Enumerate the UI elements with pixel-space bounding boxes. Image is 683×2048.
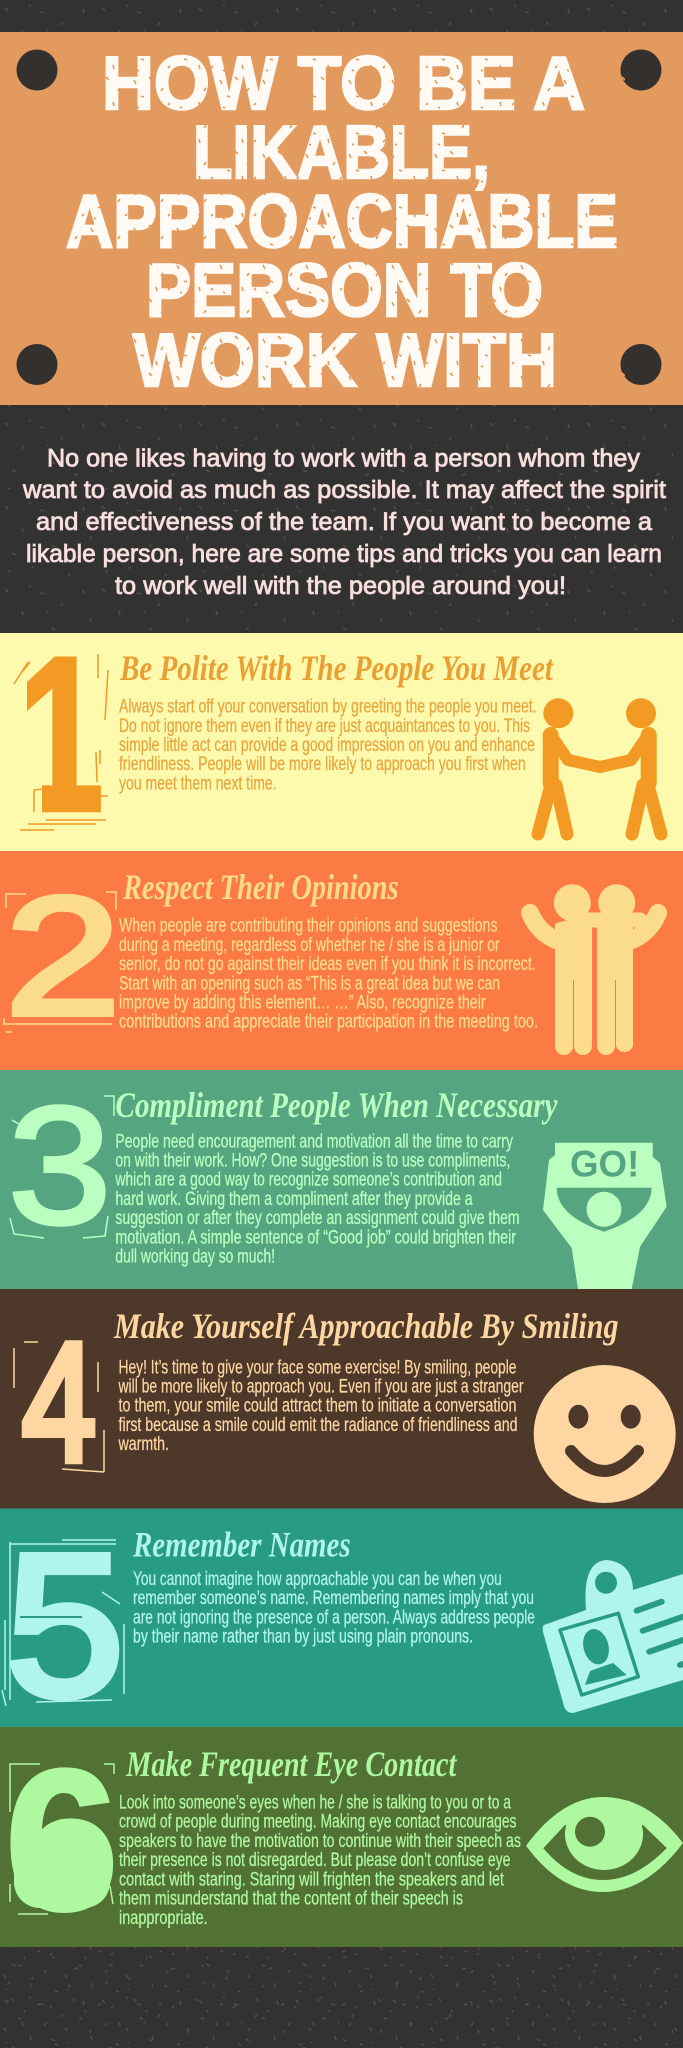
body text bbox=[119, 1792, 521, 1929]
body text: hard work. Giving them a compliment after they provide a bbox=[115, 1189, 473, 1210]
title bbox=[66, 41, 618, 402]
panel: tip 3 compliment bbox=[0, 1070, 683, 1289]
body text: When people are contributing their opinions and suggestions bbox=[119, 916, 497, 937]
icon: smiley face bbox=[534, 1365, 676, 1503]
body text: People need encouragement and motivation all the time to carry bbox=[115, 1131, 513, 1152]
numeral 4: 4 bbox=[22, 1309, 96, 1497]
body text: on with their work. How? One suggestion is to use compliments, bbox=[115, 1151, 510, 1172]
body text: friendliness. People will be more likely to approach you first when bbox=[119, 754, 526, 775]
panel: tip 2 respect bbox=[0, 851, 683, 1070]
panel: tip 1 polite bbox=[0, 612, 683, 858]
body text: dull working day so much! bbox=[115, 1246, 275, 1267]
numeral 2: 2 bbox=[5, 863, 121, 1050]
body text: which are a good way to recognize someone’s contribution and bbox=[115, 1170, 502, 1191]
body text bbox=[119, 916, 538, 1033]
panel: tip 5 names bbox=[0, 1508, 683, 1738]
body text: warmth. bbox=[118, 1434, 169, 1455]
title: APPROACHABLE bbox=[66, 179, 618, 263]
icon: person holding GO sign bbox=[543, 1143, 667, 1289]
numeral 1: 1 bbox=[18, 612, 104, 858]
numeral 6: 6 bbox=[5, 1728, 118, 1952]
body text: remember someone’s name. Remembering names imply that you bbox=[133, 1588, 534, 1609]
body text: speakers to have the motivation to continue with their speech as bbox=[119, 1831, 521, 1852]
intro paragraph: likable person, here are some tips and tricks you can learn bbox=[26, 540, 662, 568]
body text: Do not ignore them even if they are just acquaintances to you. This bbox=[119, 716, 530, 737]
body text bbox=[118, 1357, 524, 1455]
body text: inappropriate. bbox=[119, 1908, 208, 1929]
body text: you meet them next time. bbox=[119, 773, 277, 794]
body text: Look into someone’s eyes when he / she is talking to you or to a bbox=[119, 1792, 511, 1813]
body text: will be more likely to approach you. Even if you are just a stranger bbox=[118, 1377, 524, 1398]
icon: person holding GO sign: GO! bbox=[570, 1144, 639, 1185]
title: HOW TO BE A bbox=[102, 41, 585, 125]
heading: Remember Names bbox=[132, 1525, 351, 1565]
panel: tip 4 smile bbox=[0, 1289, 683, 1508]
body text: motivation. A simple sentence of “Good job” could brighten their bbox=[115, 1227, 517, 1248]
body text: first because a smile could emit the radiance of friendliness and bbox=[118, 1415, 518, 1436]
body text: Hey! It’s time to give your face some exercise! By smiling, people bbox=[118, 1357, 516, 1378]
title: WORK WITH bbox=[133, 318, 557, 402]
body text: them misunderstand that the content of their speech is bbox=[119, 1888, 463, 1910]
body text: contributions and appreciate their participation in the meeting too. bbox=[119, 1012, 538, 1033]
body text: Always start off your conversation by greeting the people you meet. bbox=[119, 697, 537, 718]
body text: Start with an opening such as “This is a great idea but we can bbox=[119, 973, 500, 994]
numeral 5: 5 bbox=[6, 1513, 124, 1738]
body text bbox=[119, 697, 537, 794]
panel: tip 6 eye contact bbox=[0, 1727, 683, 1952]
heading: Make Frequent Eye Contact bbox=[126, 1744, 457, 1784]
body text bbox=[115, 1131, 520, 1267]
title: LIKABLE, bbox=[193, 110, 490, 194]
heading: Compliment People When Necessary bbox=[115, 1085, 558, 1125]
icon: handshake bbox=[538, 698, 661, 834]
icon: ID badge bbox=[543, 1560, 683, 1713]
body text: improve by adding this element… …” Also, recognize their bbox=[119, 992, 486, 1013]
icon: banner rivets bbox=[16, 50, 662, 385]
body text: simple little act can provide a good impression on you and enhance bbox=[119, 735, 535, 756]
icon: eye bbox=[526, 1797, 683, 1892]
body text: suggestion or after they complete an assignment could give them bbox=[115, 1208, 520, 1229]
icon: two people embracing bbox=[530, 884, 658, 1055]
intro paragraph: and effectiveness of the team. If you want to become a bbox=[36, 508, 652, 536]
intro paragraph: No one likes having to work with a person whom they bbox=[47, 444, 641, 472]
body text: their presence is not disregarded. But please don’t confuse eye bbox=[119, 1850, 510, 1871]
body text: to them, your smile could attract them to initiate a conversation bbox=[118, 1396, 516, 1417]
heading: Be Polite With The People You Meet bbox=[119, 648, 554, 688]
numeral 3: 3 bbox=[8, 1073, 111, 1259]
heading: Respect Their Opinions bbox=[122, 867, 398, 907]
title: PERSON TO bbox=[146, 248, 543, 332]
body text: contact with staring. Staring will frighten the speakers and let bbox=[119, 1869, 505, 1890]
body text bbox=[133, 1569, 535, 1648]
body text: by their name rather than by just using plain pronouns. bbox=[133, 1627, 473, 1648]
body text: during a meeting, regardless of whether he / she is a junior or bbox=[119, 935, 500, 956]
body text: You cannot imagine how approachable you can be when you bbox=[133, 1569, 502, 1590]
intro paragraph: want to avoid as much as possible. It may affect the spirit bbox=[22, 476, 666, 504]
intro paragraph: to work well with the people around you! bbox=[115, 572, 566, 600]
body text: are not ignoring the presence of a person. Always address people bbox=[133, 1607, 535, 1628]
title banner bbox=[0, 32, 683, 405]
body text: senior, do not go against their ideas even if you think it is incorrect. bbox=[119, 954, 536, 975]
intro paragraph bbox=[22, 444, 666, 600]
body text: crowd of people during meeting. Making eye contact encourages bbox=[119, 1812, 516, 1833]
